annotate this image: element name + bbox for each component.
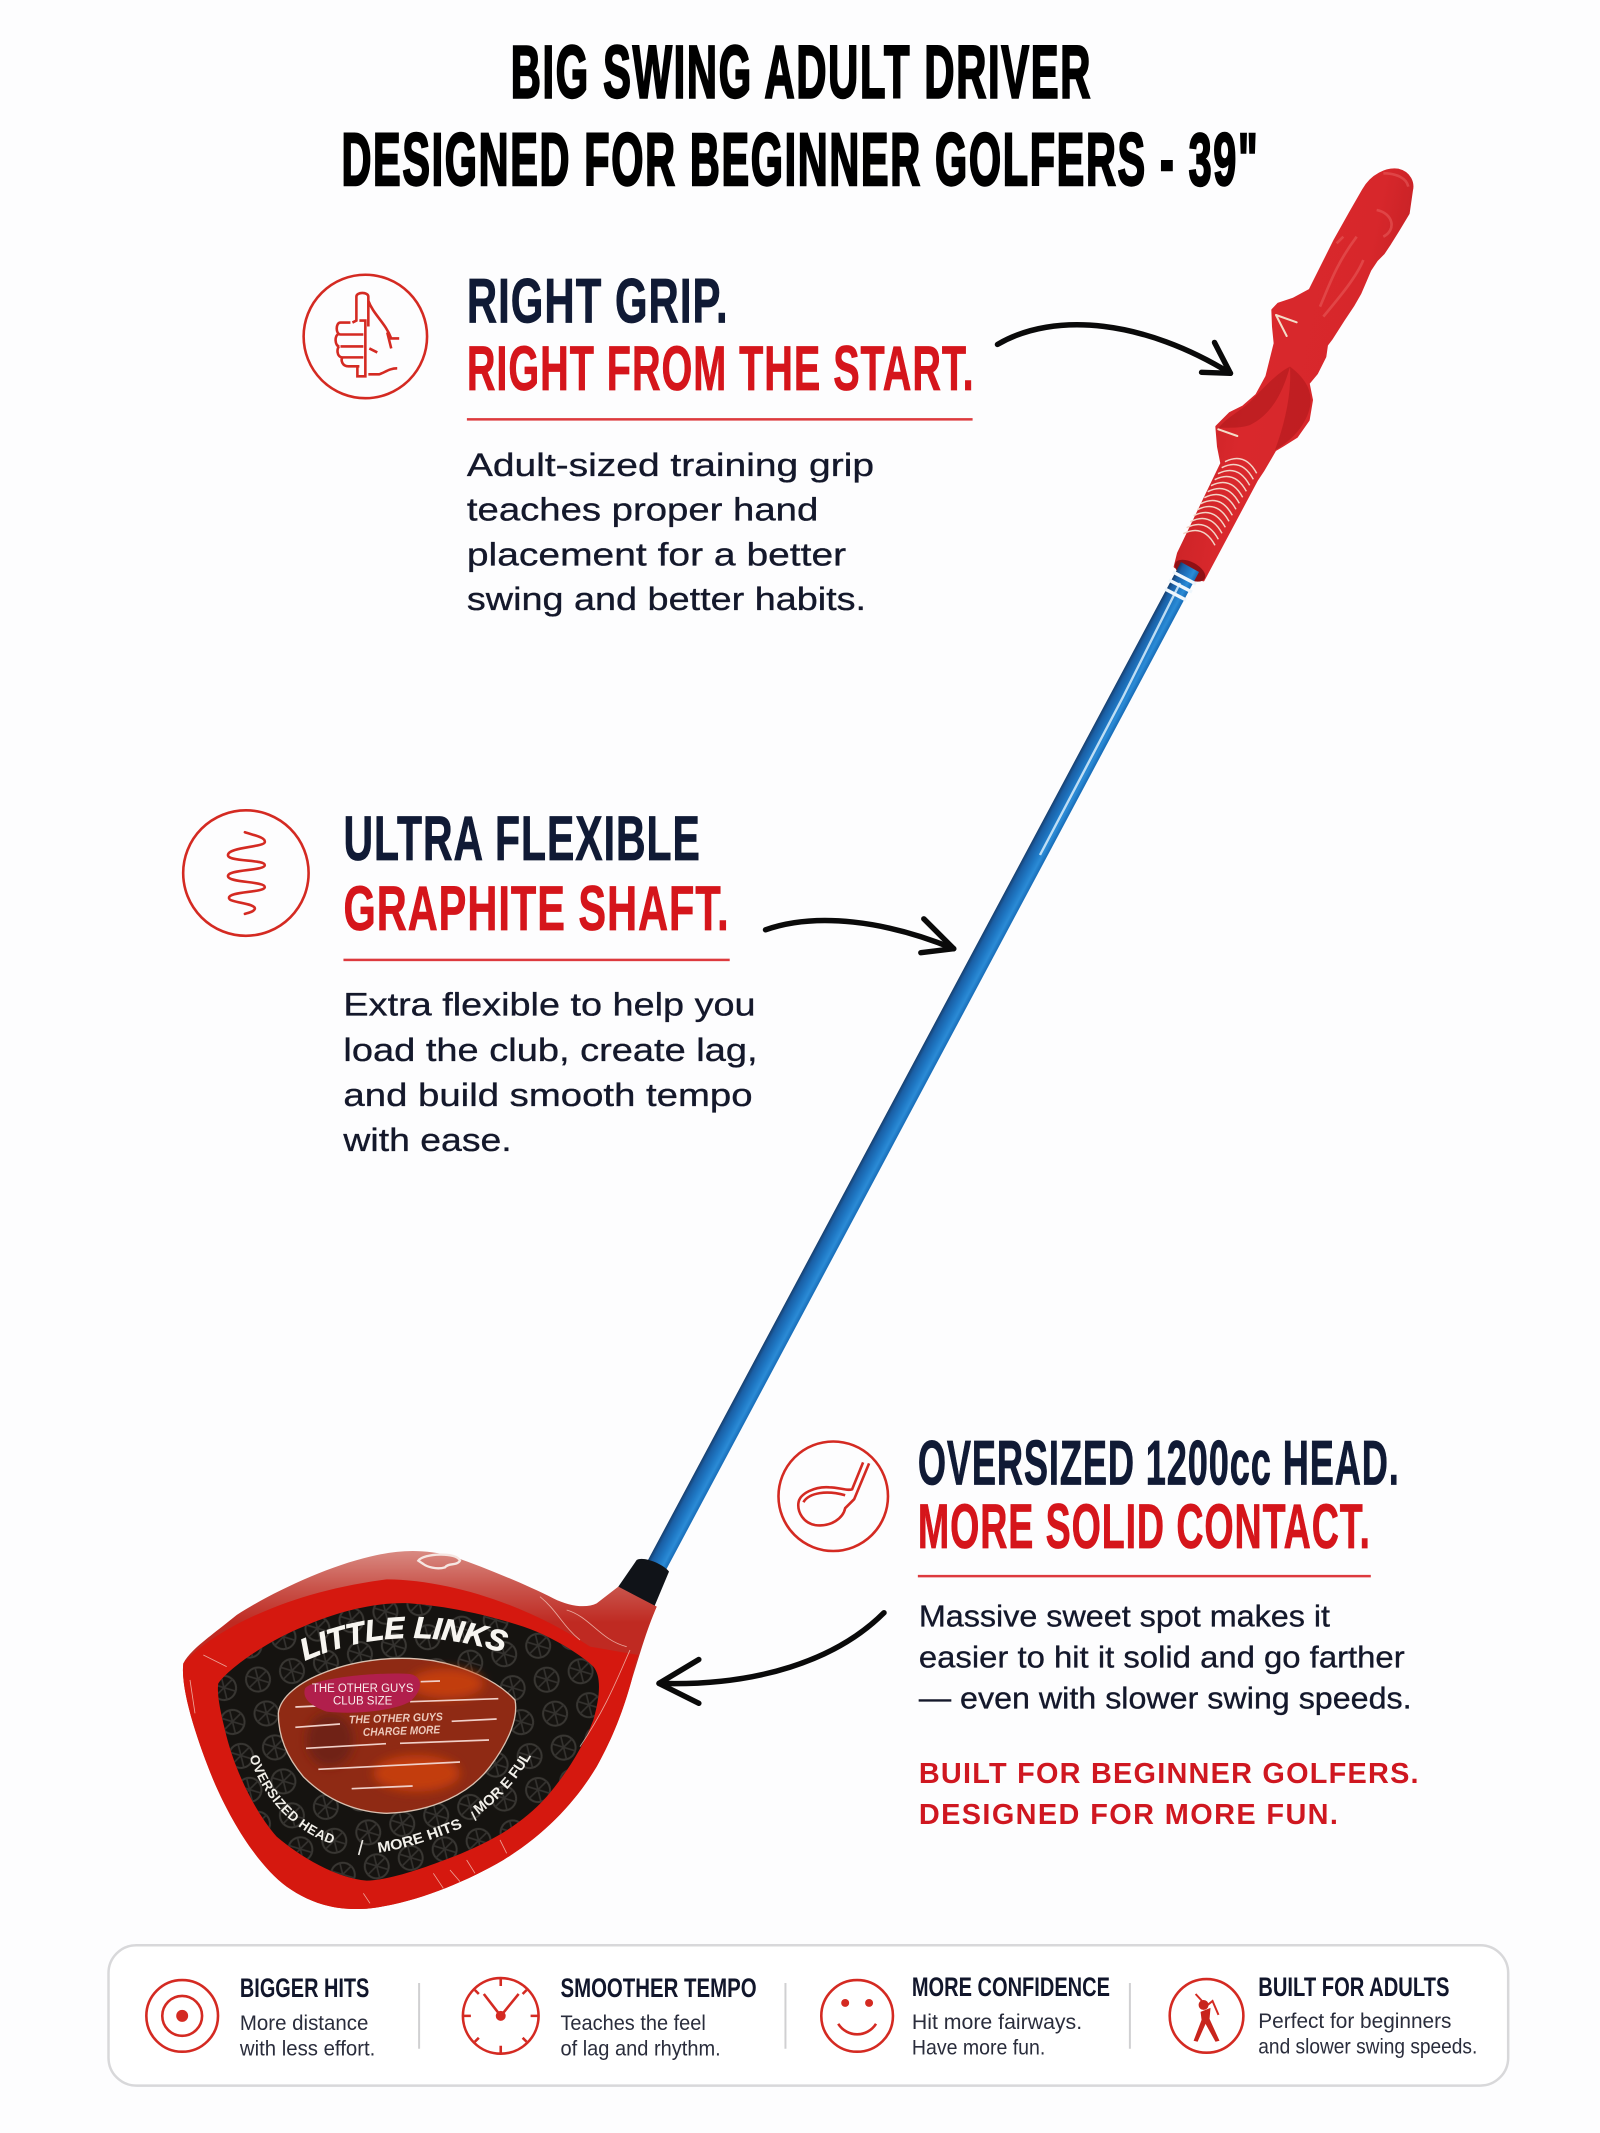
benefit: more confidence xyxy=(821,1972,1110,2060)
ferrule xyxy=(618,1559,669,1607)
club grip xyxy=(1171,170,1412,586)
text xyxy=(912,1972,1110,2060)
label: other guys charge more xyxy=(349,1711,443,1739)
lower arc text xyxy=(249,1757,377,1855)
benefit: built for adults xyxy=(1170,1972,1477,2059)
club head: LITTLE LINKS xyxy=(301,1616,508,1661)
club head: OVERSIZED HEAD xyxy=(250,1755,334,1843)
black face panel xyxy=(218,1603,599,1881)
text: MORE CONFIDENCE xyxy=(912,1972,1110,2002)
arrow: to grip xyxy=(997,325,1230,373)
heading xyxy=(467,267,975,421)
label: other guys club size: CLUB SIZE xyxy=(333,1694,392,1708)
text: BUILT FOR ADULTS xyxy=(1258,1972,1449,2002)
brand arc text xyxy=(305,1638,500,1661)
heading xyxy=(918,1428,1400,1577)
text: with less effort. xyxy=(239,2038,375,2061)
label: other guys club size: THE OTHER GUYS xyxy=(312,1681,413,1695)
grip ribs xyxy=(1183,459,1257,545)
callout: built for beginners: DESIGNED FOR MORE FUN. xyxy=(919,1799,1338,1831)
club head xyxy=(182,1551,669,1909)
icon: driver head xyxy=(778,1441,888,1551)
label: other guys charge more: CHARGE MORE xyxy=(363,1724,441,1739)
text: SMOOTHER TEMPO xyxy=(560,1973,757,2003)
golf club shaft xyxy=(648,562,1199,1570)
icon: clock xyxy=(463,1978,539,2054)
benefit: bigger hits xyxy=(146,1973,375,2061)
grip highlights xyxy=(1320,173,1408,317)
divider lines xyxy=(419,1983,1130,2049)
arrow: to shaft xyxy=(766,919,954,953)
section: right grip xyxy=(304,267,975,617)
club head: MORE HITS xyxy=(378,1819,462,1853)
text: Have more fun. xyxy=(912,2037,1045,2060)
section: oversized head xyxy=(778,1428,1419,1831)
icon: target xyxy=(146,1980,218,2052)
text xyxy=(239,1973,375,2061)
body text xyxy=(467,446,874,617)
body text: with ease. xyxy=(342,1121,512,1158)
body text: teaches proper hand xyxy=(467,491,818,528)
callout: built for beginners xyxy=(919,1758,1419,1831)
face rim xyxy=(183,1579,638,1909)
body text xyxy=(342,985,758,1158)
body text: swing and better habits. xyxy=(467,580,866,617)
heading: ULTRA FLEXIBLE xyxy=(343,804,701,874)
text xyxy=(560,1973,757,2061)
window mottling xyxy=(307,1668,483,1792)
text: More distance xyxy=(240,2012,368,2035)
label: other guys charge more: THE OTHER GUYS xyxy=(349,1711,443,1727)
grip flange shading xyxy=(1218,367,1311,450)
icon: flex squiggle xyxy=(183,810,309,936)
grip alignment marks xyxy=(1218,315,1297,436)
icon: thumbs up grip xyxy=(304,275,427,398)
arrow: to head xyxy=(659,1613,884,1703)
crown logo xyxy=(418,1555,460,1568)
label: other guys club size xyxy=(312,1681,413,1708)
rim scratches xyxy=(190,1597,630,1903)
text: and slower swing speeds. xyxy=(1258,2036,1477,2059)
icon: smiley xyxy=(821,1980,893,2052)
body text: easier to hit it solid and go farther xyxy=(919,1639,1405,1674)
text: Perfect for beginners xyxy=(1258,2010,1451,2033)
text: BIGGER HITS xyxy=(240,1973,369,2003)
body text: — even with slower swing speeds. xyxy=(919,1680,1412,1715)
body text: Adult-sized training grip xyxy=(467,446,874,483)
face score lines xyxy=(295,1681,498,1789)
hosel xyxy=(597,1587,657,1647)
text xyxy=(1258,1972,1477,2059)
text: of lag and rhythm. xyxy=(560,2038,721,2061)
icon: golfer xyxy=(1170,1979,1243,2053)
heading: RIGHT FROM THE START. xyxy=(467,334,975,404)
bottom benefits panel xyxy=(109,1945,1508,2086)
magenta highlight xyxy=(304,1674,420,1713)
heading: RIGHT GRIP. xyxy=(467,267,729,337)
section: graphite shaft xyxy=(183,804,758,1158)
title xyxy=(341,30,1259,201)
crown xyxy=(183,1551,657,1909)
body text: placement for a better xyxy=(467,535,846,572)
club head: MOR E FUL xyxy=(473,1755,532,1814)
title: BIG SWING ADULT DRIVER xyxy=(511,30,1092,114)
body text: Extra flexible to help you xyxy=(343,985,756,1022)
heading xyxy=(343,804,730,961)
shaft decals xyxy=(1165,572,1196,600)
body text: and build smooth tempo xyxy=(343,1076,753,1113)
heading: GRAPHITE SHAFT. xyxy=(343,874,730,944)
body text: load the club, create lag, xyxy=(343,1031,758,1068)
callout: built for beginners: BUILT FOR BEGINNER GOLFERS. xyxy=(919,1758,1419,1790)
grip opening xyxy=(1171,555,1209,586)
center window xyxy=(278,1658,516,1813)
benefit: smoother tempo xyxy=(463,1973,757,2061)
text: Teaches the feel xyxy=(560,2012,706,2035)
text: Hit more fairways. xyxy=(912,2011,1082,2034)
shaft highlight xyxy=(1040,583,1180,855)
slash divider xyxy=(359,1812,476,1855)
body text xyxy=(919,1599,1412,1715)
body text: Massive sweet spot makes it xyxy=(919,1599,1330,1634)
